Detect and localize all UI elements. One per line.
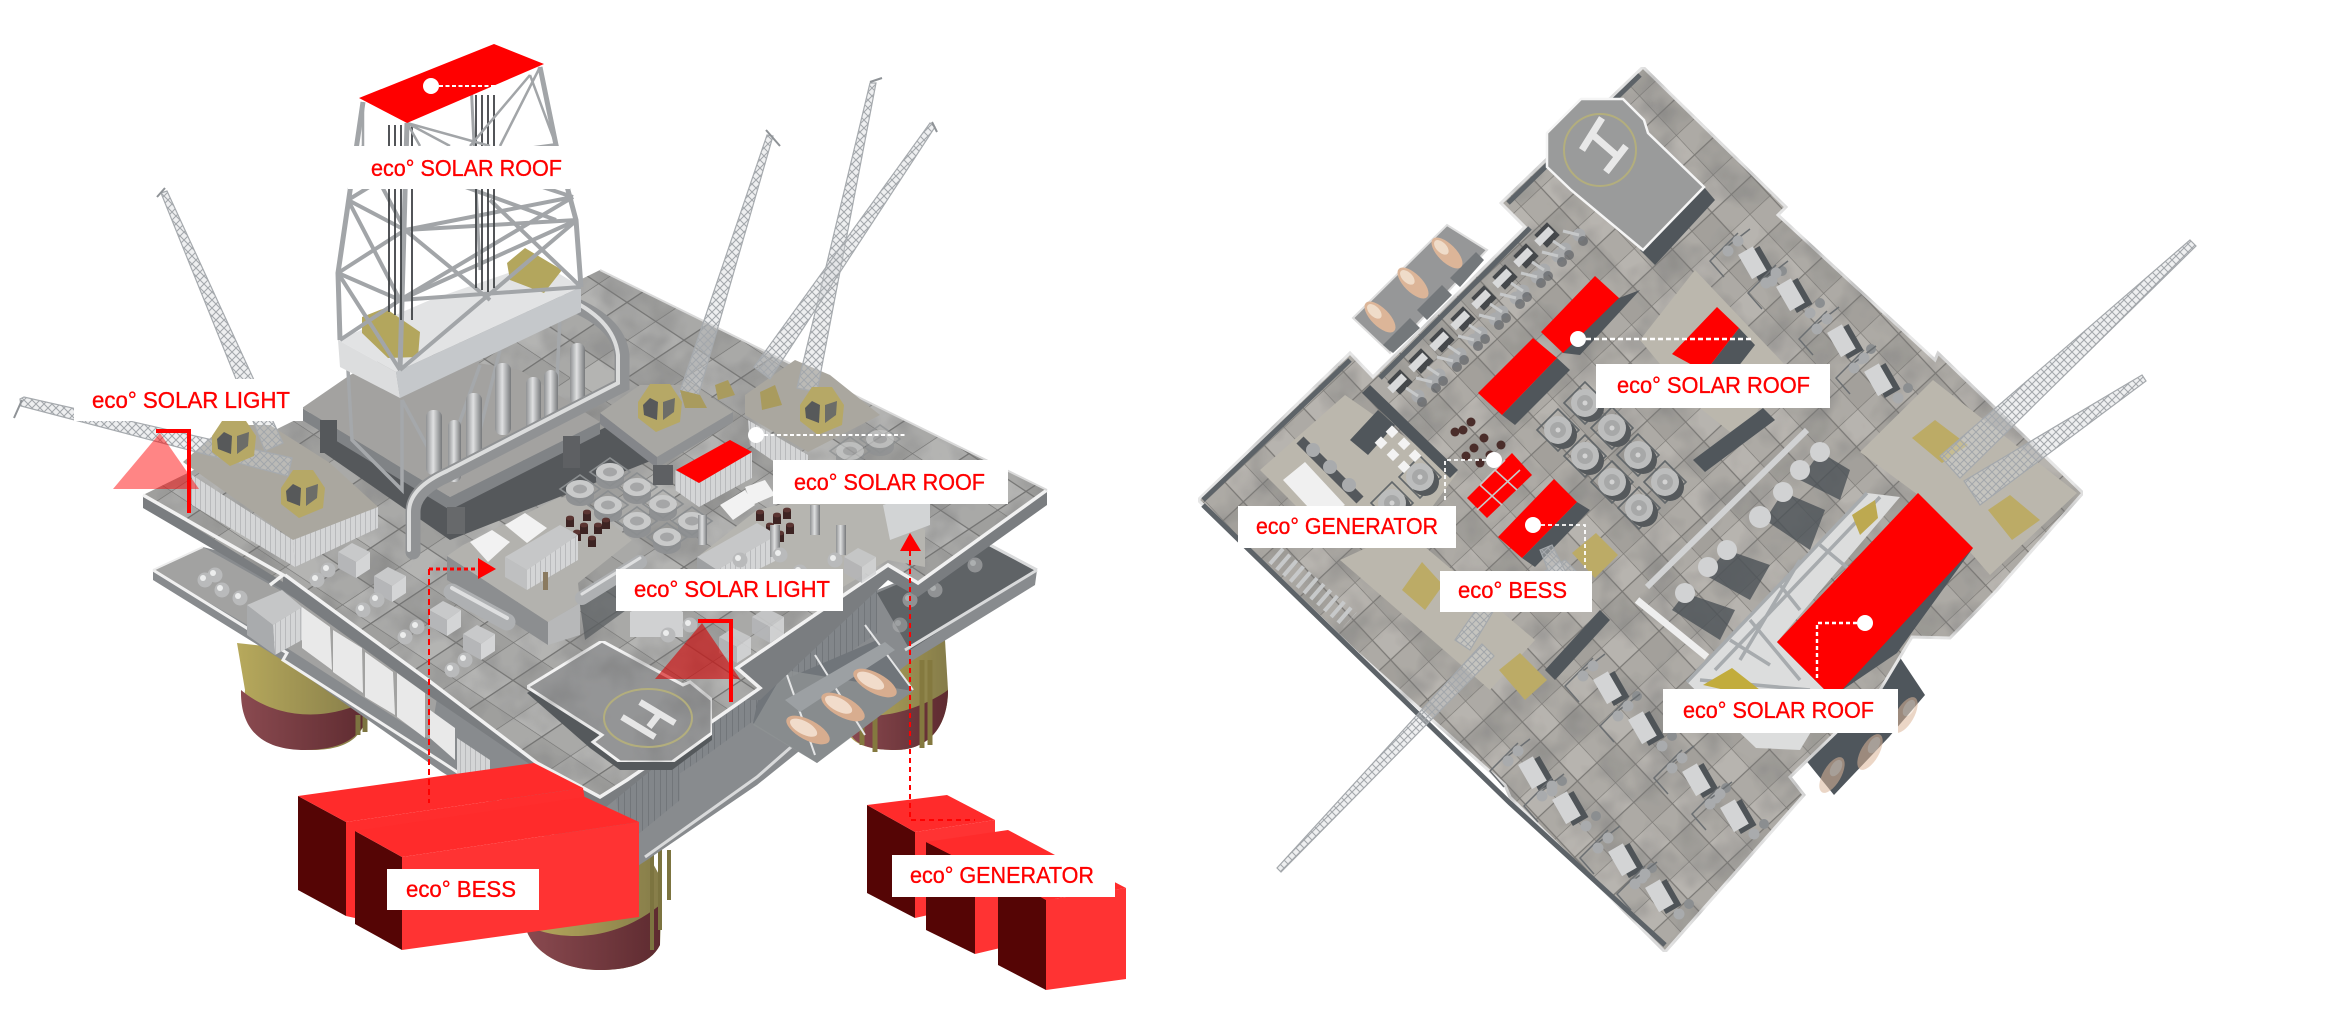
raised deck: tank pad bbox=[447, 497, 640, 645]
crane cabs bbox=[212, 380, 844, 518]
leader line: BESS bbox=[429, 558, 496, 803]
right wall bbox=[625, 590, 877, 800]
red panel: generator grid bbox=[1467, 453, 1532, 518]
raised crane pad centre bbox=[600, 385, 733, 485]
red box: BESS bbox=[298, 763, 639, 950]
derrick tower bbox=[338, 60, 581, 370]
label: eco SOLAR ROOF top view: eco° SOLAR ROOF bbox=[1617, 372, 1810, 398]
marker: roof A bbox=[1570, 331, 1752, 347]
label: eco GENERATOR top view: eco° GENERATOR bbox=[1256, 513, 1438, 539]
tower platform bbox=[338, 262, 581, 398]
lifeboat rack bbox=[753, 625, 913, 763]
label: eco SOLAR ROOF deck bbox=[773, 460, 1008, 504]
column: front caisson bbox=[525, 840, 669, 970]
panel: top-down platform view bbox=[1198, 67, 2196, 952]
process units top right bbox=[1710, 229, 1913, 404]
red panel: derrick solar roof bbox=[359, 44, 544, 123]
marker: generator bbox=[1445, 452, 1502, 503]
label: eco SOLAR ROOF top bbox=[348, 146, 570, 189]
red box: solar container bbox=[675, 440, 752, 507]
label: eco BESS: eco° BESS bbox=[406, 876, 516, 902]
equipment cubes bbox=[310, 543, 495, 678]
tower top view bbox=[1687, 493, 1973, 750]
compressor units bbox=[1387, 222, 1588, 407]
marker: derrick roof bbox=[423, 78, 507, 94]
red panel: roof C bbox=[1672, 307, 1739, 372]
process vessels bbox=[426, 343, 585, 482]
icon: deck solar light bbox=[655, 621, 740, 702]
cabs top view bbox=[1402, 420, 2040, 700]
red panel: BESS roof bbox=[1498, 479, 1577, 558]
raised crane pad right bbox=[745, 360, 880, 485]
lifeboat panel upper bbox=[1353, 225, 1487, 353]
label: eco SOLAR LIGHT deck: eco° SOLAR LIGHT bbox=[634, 576, 830, 602]
marker: derrick roof top view bbox=[1817, 615, 1873, 678]
label: eco SOLAR ROOF derrick top view bbox=[1663, 689, 1898, 733]
upper deck bbox=[143, 270, 1047, 812]
container C3 bbox=[697, 523, 777, 590]
label: eco GENERATOR bbox=[892, 855, 1115, 897]
white bags bbox=[470, 513, 547, 562]
red panels: roof A and B bbox=[1478, 276, 1619, 415]
worker bbox=[543, 572, 548, 590]
deck plate bbox=[1198, 67, 2083, 952]
generator set bbox=[1283, 410, 1421, 520]
column: left caisson bbox=[237, 643, 368, 750]
deck shadow strips bbox=[1362, 187, 1775, 680]
mezzanine deck bbox=[302, 350, 600, 534]
round tanks bbox=[560, 458, 712, 554]
red panel: derrick roof top view bbox=[1777, 493, 1973, 697]
label: eco BESS top view: eco° BESS bbox=[1458, 577, 1567, 603]
helideck bbox=[527, 641, 712, 770]
cranes top view bbox=[1277, 240, 2196, 872]
label: eco SOLAR ROOF deck: eco° SOLAR ROOF bbox=[794, 469, 985, 495]
marker: container roof bbox=[748, 427, 907, 443]
label: eco SOLAR ROOF top: eco° SOLAR ROOF bbox=[371, 155, 562, 181]
tower substructure legs bbox=[348, 315, 560, 490]
red box: generators bbox=[867, 795, 1126, 990]
mezzanine shadow bbox=[320, 425, 653, 540]
label: eco SOLAR LIGHT deck bbox=[616, 569, 843, 611]
label: eco BESS bbox=[387, 869, 539, 910]
label: eco BESS top view bbox=[1440, 571, 1592, 612]
radiator fins bbox=[1275, 555, 1350, 620]
process units bottom bbox=[1490, 654, 1769, 920]
barrels right bbox=[756, 508, 794, 542]
barrels top view bbox=[1450, 418, 1506, 468]
separators with shadows bbox=[1637, 430, 1850, 657]
panel: isometric platform view bbox=[14, 44, 1126, 990]
right pale pad bbox=[700, 500, 925, 590]
barrels bbox=[566, 510, 610, 547]
label: eco SOLAR LIGHT left bbox=[74, 379, 303, 421]
right-side machinery bbox=[630, 425, 930, 663]
label: eco SOLAR ROOF derrick top view: eco° SOLAR ROOF bbox=[1683, 697, 1874, 723]
helipad bbox=[1547, 99, 1704, 250]
concrete pads bbox=[1260, 270, 2077, 690]
raised crane pad left bbox=[183, 425, 378, 567]
leader line: generator bbox=[900, 533, 975, 820]
label: eco GENERATOR: eco° GENERATOR bbox=[910, 862, 1094, 888]
lower deck bbox=[153, 545, 1037, 880]
icon: left solar light bbox=[113, 431, 199, 513]
rotary tanks bbox=[1371, 382, 1686, 529]
marker: BESS bbox=[1525, 517, 1585, 568]
lower deck machinery bbox=[198, 558, 982, 655]
label: eco GENERATOR top view bbox=[1238, 506, 1456, 548]
yellow tower cabs bbox=[362, 248, 562, 358]
horizontal vessels bbox=[452, 558, 640, 622]
main process pipe bbox=[409, 296, 622, 552]
column: right caisson bbox=[845, 640, 948, 752]
label: eco SOLAR LIGHT left: eco° SOLAR LIGHT bbox=[92, 387, 290, 413]
label: eco SOLAR ROOF top view bbox=[1596, 364, 1830, 408]
cranes bbox=[14, 78, 937, 476]
deck edge shadow bbox=[1203, 75, 1665, 945]
wall panels bbox=[302, 607, 490, 790]
white bags right bbox=[720, 480, 775, 520]
lifeboat panel lower bbox=[1800, 653, 1925, 797]
container C1 bbox=[505, 525, 578, 590]
